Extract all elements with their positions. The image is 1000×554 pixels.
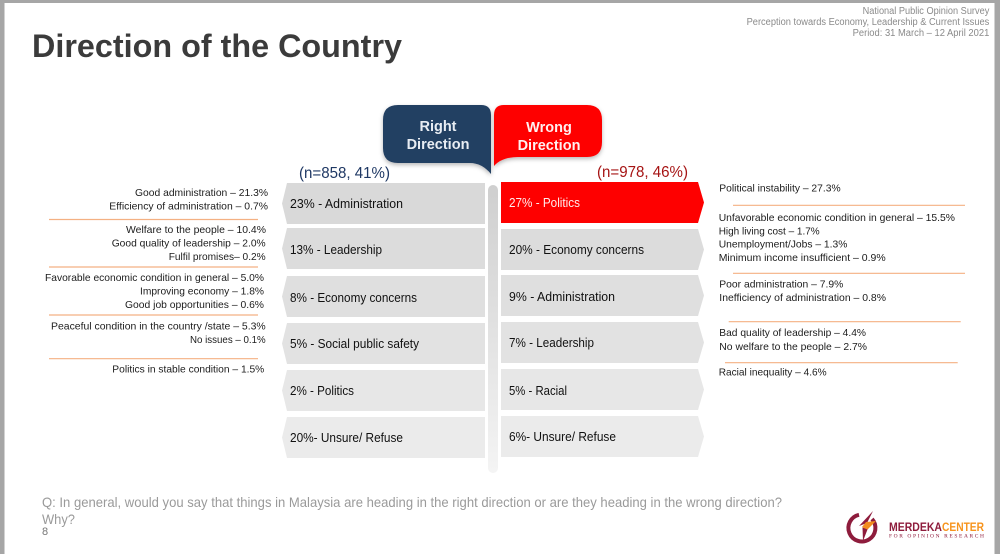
panel: right direction reasons (282, 183, 485, 458)
right notes: wrong direction breakdown (719, 182, 965, 378)
row: unsure or refuse (501, 416, 704, 457)
row: economy concerns (501, 229, 704, 270)
right notes: wrong direction breakdown: Inefficiency of administration – 0.8% (719, 292, 886, 304)
survey question: Q: In general, would you say that things in Malaysia are heading in the right direction or are they heading in the wrong direction? (42, 494, 782, 510)
left notes: right direction breakdown: Politics in stable condition – 1.5% (112, 364, 264, 376)
left notes: right direction breakdown: Good job opportunities – 0.6% (125, 299, 264, 311)
row: racial: 5% - Racial (509, 384, 567, 398)
survey details: National Public Opinion Survey (863, 6, 989, 17)
left notes: right direction breakdown: Improving economy – 1.8% (140, 286, 264, 298)
callout: right direction: Direction (407, 137, 469, 153)
logo: Merdeka Center: CENTER (942, 522, 985, 534)
survey question: Why? (42, 511, 75, 527)
right notes: wrong direction breakdown: Bad quality of leadership – 4.4% (719, 327, 866, 339)
right notes: wrong direction breakdown: Racial inequality – 4.6% (719, 366, 827, 378)
row: social public safety (282, 323, 485, 364)
right notes: wrong direction breakdown: Unemployment/Jobs – 1.3% (719, 238, 847, 250)
left notes: right direction breakdown (45, 187, 268, 376)
logo: Merdeka Center: MERDEKA (889, 522, 942, 534)
row: administration (501, 275, 704, 316)
left notes: right direction breakdown: Welfare to the people – 10.4% (126, 224, 266, 236)
row: administration (282, 183, 485, 224)
row: leadership (282, 228, 485, 269)
row: leadership: 13% - Leadership (290, 243, 382, 257)
logo: Merdeka Center (848, 511, 985, 541)
callout: wrong direction (494, 105, 602, 166)
row: leadership (501, 322, 704, 363)
survey question (42, 494, 782, 527)
row: economy concerns: 8% - Economy concerns (290, 291, 417, 305)
right notes: wrong direction breakdown: Political instability – 27.3% (719, 182, 841, 194)
right notes: wrong direction breakdown: Minimum income insufficient – 0.9% (719, 252, 886, 264)
row: unsure or refuse: 20%- Unsure/ Refuse (290, 431, 403, 445)
row: racial (501, 369, 704, 410)
survey details: Period: 31 March – 12 April 2021 (853, 28, 990, 39)
title: Direction of the Country (32, 28, 402, 64)
page number: 8 (42, 526, 48, 538)
left notes: right direction breakdown: Efficiency of administration – 0.7% (109, 200, 268, 212)
left notes: right direction breakdown: Fulfil promises– 0.2% (169, 251, 266, 263)
row: economy concerns: 20% - Economy concerns (509, 243, 644, 257)
callout: right direction (383, 105, 491, 174)
row: politics: 2% - Politics (290, 384, 354, 398)
icon: lightning circle (848, 511, 876, 541)
row: administration: 23% - Administration (290, 197, 403, 211)
row: politics (501, 182, 704, 223)
logo: Merdeka Center: FOR OPINION RESEARCH (889, 534, 984, 540)
centre spine (488, 185, 498, 473)
right notes: wrong direction breakdown: Unfavorable economic condition in general – 15.5% (719, 212, 955, 224)
right notes: wrong direction breakdown: High living cost – 1.7% (719, 226, 820, 238)
right notes: wrong direction breakdown: Poor administration – 7.9% (719, 278, 843, 290)
right notes: wrong direction breakdown: No welfare to the people – 2.7% (719, 341, 867, 353)
callout: right direction: Right (419, 119, 457, 135)
left notes: right direction breakdown: No issues – 0.1% (190, 334, 266, 346)
row: unsure or refuse (282, 417, 485, 458)
row: administration: 9% - Administration (509, 290, 615, 304)
row: economy concerns (282, 276, 485, 317)
left notes: right direction breakdown: Favorable economic condition in general – 5.0% (45, 272, 264, 284)
left notes: right direction breakdown: Peaceful condition in the country /state – 5.3% (51, 320, 266, 332)
panel: wrong direction reasons (501, 182, 704, 457)
row: unsure or refuse: 6%- Unsure/ Refuse (509, 430, 616, 444)
sample size: wrong direction: (n=978, 46%) (597, 164, 688, 181)
left notes: right direction breakdown: Good quality of leadership – 2.0% (112, 238, 266, 250)
row: politics: 27% - Politics (509, 196, 580, 210)
row: social public safety: 5% - Social public safety (290, 337, 420, 351)
survey details (747, 6, 990, 39)
callout: wrong direction: Direction (518, 138, 580, 154)
left notes: right direction breakdown: Good administration – 21.3% (135, 187, 268, 199)
row: politics (282, 370, 485, 411)
sample size: right direction: (n=858, 41%) (299, 165, 390, 182)
row: leadership: 7% - Leadership (509, 336, 594, 350)
callout: wrong direction: Wrong (526, 120, 572, 136)
